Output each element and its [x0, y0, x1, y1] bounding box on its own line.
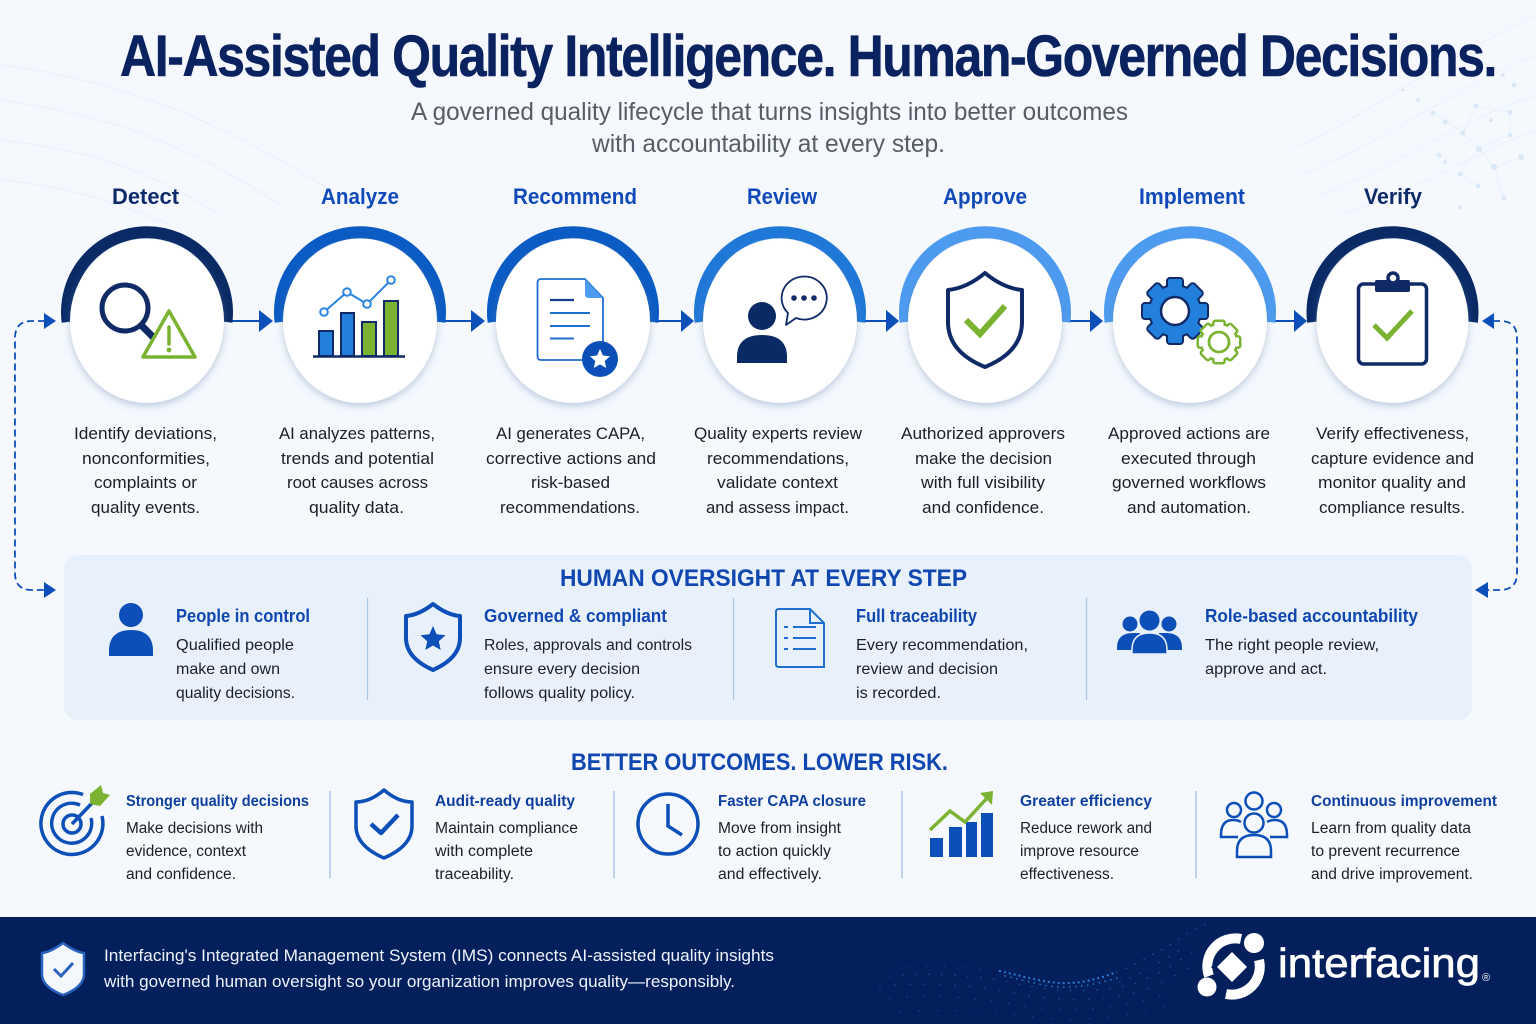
- item: audit-ready quality: with complete: [434, 843, 533, 860]
- heading: Verify: [1364, 184, 1423, 209]
- item: role-based accountability: Role-based accountability: [1205, 606, 1418, 626]
- description: recommendations.: [500, 498, 640, 517]
- item: faster CAPA closure: Faster CAPA closure: [718, 793, 866, 810]
- item: governed and compliant: follows quality policy.: [484, 685, 635, 702]
- step: Approve: [901, 184, 1065, 517]
- logo: interfacing: [1198, 933, 1490, 996]
- description: compliance results.: [1319, 498, 1465, 517]
- step: Detect: [67, 184, 227, 517]
- item: full traceability: Every recommendation,: [856, 637, 1028, 654]
- item: greater efficiency: Greater efficiency: [1020, 793, 1152, 810]
- panel: human oversight: [64, 555, 1472, 720]
- description: [1311, 424, 1474, 517]
- item: people in control: make and own: [176, 661, 280, 678]
- item: audit-ready quality: traceability.: [435, 866, 514, 883]
- description: quality data.: [309, 498, 404, 517]
- faint background network, top right: [1290, 15, 1536, 215]
- item: role-based accountability: The right people review,: [1205, 637, 1379, 654]
- icon: growth chart: [930, 791, 993, 857]
- description: Verify effectiveness,: [1316, 424, 1469, 443]
- description: trends and potential: [281, 449, 434, 468]
- step: Verify: [1311, 184, 1474, 517]
- description: AI generates CAPA,: [496, 424, 645, 443]
- panel background: [64, 555, 1472, 720]
- description: [74, 424, 217, 517]
- icon: gears: [1143, 279, 1239, 362]
- item: full traceability: Full traceability: [856, 606, 977, 626]
- section heading: BETTER OUTCOMES. LOWER RISK.: [571, 749, 948, 776]
- heading: Detect: [112, 184, 180, 209]
- icon: clock: [638, 794, 698, 854]
- item: people in control: Qualified people: [176, 637, 294, 654]
- item: governed and compliant: [484, 606, 692, 702]
- heading: Approve: [943, 184, 1027, 209]
- icon: person with speech bubble: [737, 276, 827, 363]
- item: audit-ready quality: [434, 793, 578, 883]
- item: continuous improvement: Learn from quality data: [1311, 820, 1471, 837]
- description: [279, 424, 435, 517]
- logo wordmark: interfacing: [1278, 940, 1480, 986]
- logo mark: [1198, 933, 1264, 996]
- description: [1108, 424, 1270, 517]
- icon: shield with check: [356, 790, 412, 858]
- section: better outcomes: [41, 749, 1498, 883]
- heading: Recommend: [513, 184, 637, 209]
- item: full traceability: [856, 606, 1028, 702]
- item: faster CAPA closure: to action quickly: [718, 843, 831, 860]
- description: [694, 424, 863, 517]
- panel heading: HUMAN OVERSIGHT AT EVERY STEP: [560, 565, 967, 592]
- heading: Analyze: [321, 184, 399, 209]
- subtitle: [411, 98, 1128, 158]
- node: [1312, 232, 1472, 403]
- item: continuous improvement: to prevent recurrence: [1311, 843, 1460, 860]
- item: full traceability: review and decision: [856, 661, 998, 678]
- arrowheads: right loop: [1475, 313, 1494, 598]
- description: monitor quality and: [1318, 473, 1466, 492]
- description: and confidence.: [922, 498, 1044, 517]
- faint background curves, left: [0, 65, 330, 225]
- node: [280, 232, 440, 403]
- description: complaints or: [94, 473, 197, 492]
- description: risk-based: [531, 473, 610, 492]
- step: Implement: [1108, 184, 1270, 517]
- description: recommendations,: [707, 449, 849, 468]
- icon: document with star badge: [538, 279, 618, 377]
- icon: magnifier and warning: [102, 285, 195, 357]
- footer statement: with governed human oversight so your organization improves quality—responsibly.: [103, 972, 735, 991]
- description: and automation.: [1127, 498, 1251, 517]
- description: with full visibility: [920, 473, 1046, 492]
- item: continuous improvement: and drive improvement.: [1311, 866, 1473, 883]
- item: greater efficiency: improve resource: [1020, 843, 1139, 860]
- item: greater efficiency: Reduce rework and: [1020, 820, 1152, 837]
- node: [493, 232, 653, 403]
- description: corrective actions and: [486, 449, 656, 468]
- item: people in control: quality decisions.: [176, 685, 295, 702]
- description: governed workflows: [1112, 473, 1266, 492]
- description: quality events.: [91, 498, 200, 517]
- step: Analyze: [279, 184, 440, 517]
- arrowheads: left loop: [44, 313, 56, 598]
- description: Quality experts review: [694, 424, 863, 443]
- item: continuous improvement: [1311, 793, 1498, 883]
- footer statement: [103, 946, 774, 991]
- footer statement: Interfacing's Integrated Management System (IMS) connects AI-assisted quality insights: [104, 946, 774, 965]
- icon: clipboard with check: [1358, 273, 1426, 364]
- registered mark: ®: [1482, 972, 1490, 984]
- item: stronger quality decisions: [126, 793, 309, 883]
- item: stronger quality decisions: Make decisions with: [126, 820, 263, 837]
- footer band: [0, 917, 1536, 1024]
- item: governed and compliant: ensure every decision: [484, 661, 640, 678]
- item: role-based accountability: [1205, 606, 1418, 678]
- item: audit-ready quality: Maintain compliance: [435, 820, 578, 837]
- feedback loop: left dashed connector: [15, 321, 45, 590]
- node: [905, 232, 1065, 403]
- node: [1110, 232, 1270, 403]
- subtitle: A governed quality lifecycle that turns insights into better outcomes: [411, 98, 1128, 126]
- item: greater efficiency: [1020, 793, 1152, 883]
- description: [901, 424, 1065, 517]
- description: make the decision: [915, 449, 1052, 468]
- description: nonconformities,: [82, 449, 210, 468]
- item: stronger quality decisions: evidence, context: [126, 843, 247, 860]
- node: [700, 232, 860, 403]
- description: [486, 424, 656, 517]
- description: validate context: [717, 473, 838, 492]
- heading: Review: [747, 184, 818, 209]
- description: Approved actions are: [1108, 424, 1270, 443]
- description: Authorized approvers: [901, 424, 1065, 443]
- description: executed through: [1121, 449, 1256, 468]
- step: Recommend: [486, 184, 656, 517]
- heading: Implement: [1139, 184, 1246, 209]
- subtitle: with accountability at every step.: [591, 130, 945, 158]
- item: continuous improvement: Continuous improvement: [1311, 793, 1498, 810]
- icon: shield with star: [406, 604, 460, 670]
- description: capture evidence and: [1311, 449, 1474, 468]
- footer dotted wave: [880, 925, 1205, 1019]
- item: faster CAPA closure: and effectively.: [718, 866, 822, 883]
- item: faster CAPA closure: [718, 793, 866, 883]
- step: Review: [694, 184, 863, 517]
- connector arrows between steps: [229, 310, 1307, 332]
- item: governed and compliant: Roles, approvals and controls: [484, 637, 692, 654]
- item: full traceability: is recorded.: [856, 685, 941, 702]
- item: stronger quality decisions: Stronger quality decisions: [126, 793, 309, 810]
- icon: team: [1117, 610, 1182, 654]
- item: greater efficiency: effectiveness.: [1020, 866, 1114, 883]
- description: root causes across: [287, 473, 428, 492]
- description: AI analyzes patterns,: [279, 424, 435, 443]
- icon: shield with check: [948, 273, 1022, 367]
- item: people in control: People in control: [176, 606, 310, 626]
- item: governed and compliant: Governed & compliant: [484, 606, 667, 626]
- description: Identify deviations,: [74, 424, 217, 443]
- item: people in control: [176, 606, 310, 702]
- feedback loop: right dashed connector: [1488, 321, 1517, 590]
- icon: document list: [776, 609, 824, 667]
- node: [67, 232, 227, 403]
- item: audit-ready quality: Audit-ready quality: [435, 793, 575, 810]
- item: stronger quality decisions: and confidence.: [126, 866, 236, 883]
- icon: person: [109, 603, 153, 656]
- description: and assess impact.: [706, 498, 849, 517]
- item: faster CAPA closure: Move from insight: [718, 820, 842, 837]
- icon: target with arrow: [41, 785, 110, 854]
- icon: people group outline: [1221, 792, 1287, 857]
- icon: footer shield: [42, 943, 84, 995]
- icon: bar chart with trend line: [313, 276, 405, 356]
- item: role-based accountability: approve and act.: [1205, 661, 1327, 678]
